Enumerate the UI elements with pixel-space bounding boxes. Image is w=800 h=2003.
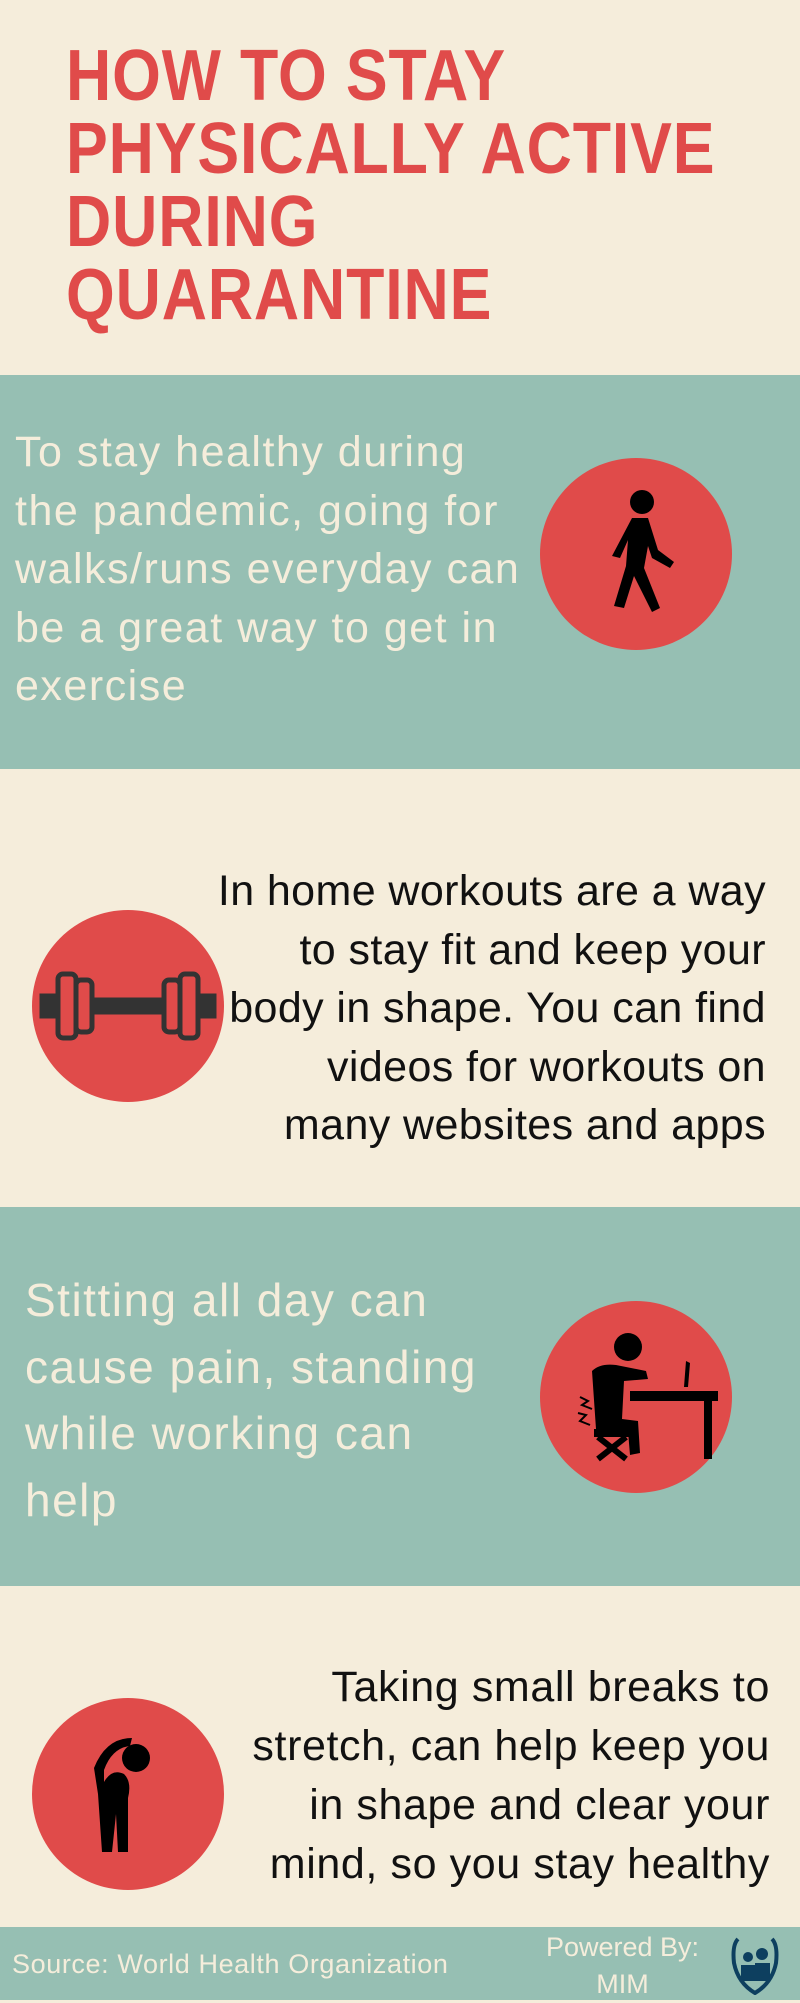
text: sitting: help [25, 1474, 118, 1526]
title: QUARANTINE [66, 255, 492, 335]
icon: stretching person [32, 1698, 224, 1890]
text: sitting: cause pain, standing [25, 1340, 477, 1392]
text: walks: be a great way to get in [15, 604, 498, 652]
panel: home workouts [32, 867, 766, 1149]
text: stretch: in shape and clear your [309, 1781, 770, 1829]
text: walks: exercise [15, 662, 187, 710]
text: stretch: mind, so you stay healthy [270, 1840, 770, 1888]
text: walks [15, 428, 520, 710]
powered by [546, 1932, 699, 1999]
text: walks: walks/runs everyday can [15, 545, 520, 593]
text: home workouts: many websites and apps [284, 1101, 766, 1149]
title: DURING [66, 182, 318, 262]
text: sitting: Stitting all day can [25, 1274, 428, 1326]
text: walks: the pandemic, going for [15, 486, 499, 534]
title [66, 36, 715, 335]
icon: MIM logo [732, 1938, 778, 1995]
source text: Source: World Health Organization [12, 1949, 449, 1979]
text: home workouts [218, 867, 766, 1149]
powered by: MIM [596, 1969, 649, 1999]
text: stretch: Taking small breaks to [331, 1663, 770, 1711]
icon: desk worker [540, 1301, 732, 1493]
icon: walking person [540, 458, 732, 650]
text: sitting [25, 1274, 477, 1526]
icon: dumbbell [32, 910, 224, 1102]
footer [0, 1927, 800, 2000]
text: stretch [252, 1663, 770, 1888]
panel: walks [0, 375, 800, 769]
title: PHYSICALLY ACTIVE [66, 109, 715, 189]
powered by: Powered By: [546, 1932, 699, 1962]
title: HOW TO STAY [66, 36, 506, 116]
text: stretch: stretch, can help keep you [252, 1722, 770, 1770]
panel: sitting [0, 1207, 800, 1586]
text: home workouts: to stay fit and keep your [299, 926, 766, 974]
text: walks: To stay healthy during [15, 428, 466, 476]
panel: stretch [32, 1663, 770, 1890]
text: home workouts: In home workouts are a way [218, 867, 766, 915]
text: home workouts: body in shape. You can find [229, 984, 766, 1032]
text: home workouts: videos for workouts on [327, 1042, 766, 1090]
text: sitting: while working can [25, 1407, 414, 1459]
